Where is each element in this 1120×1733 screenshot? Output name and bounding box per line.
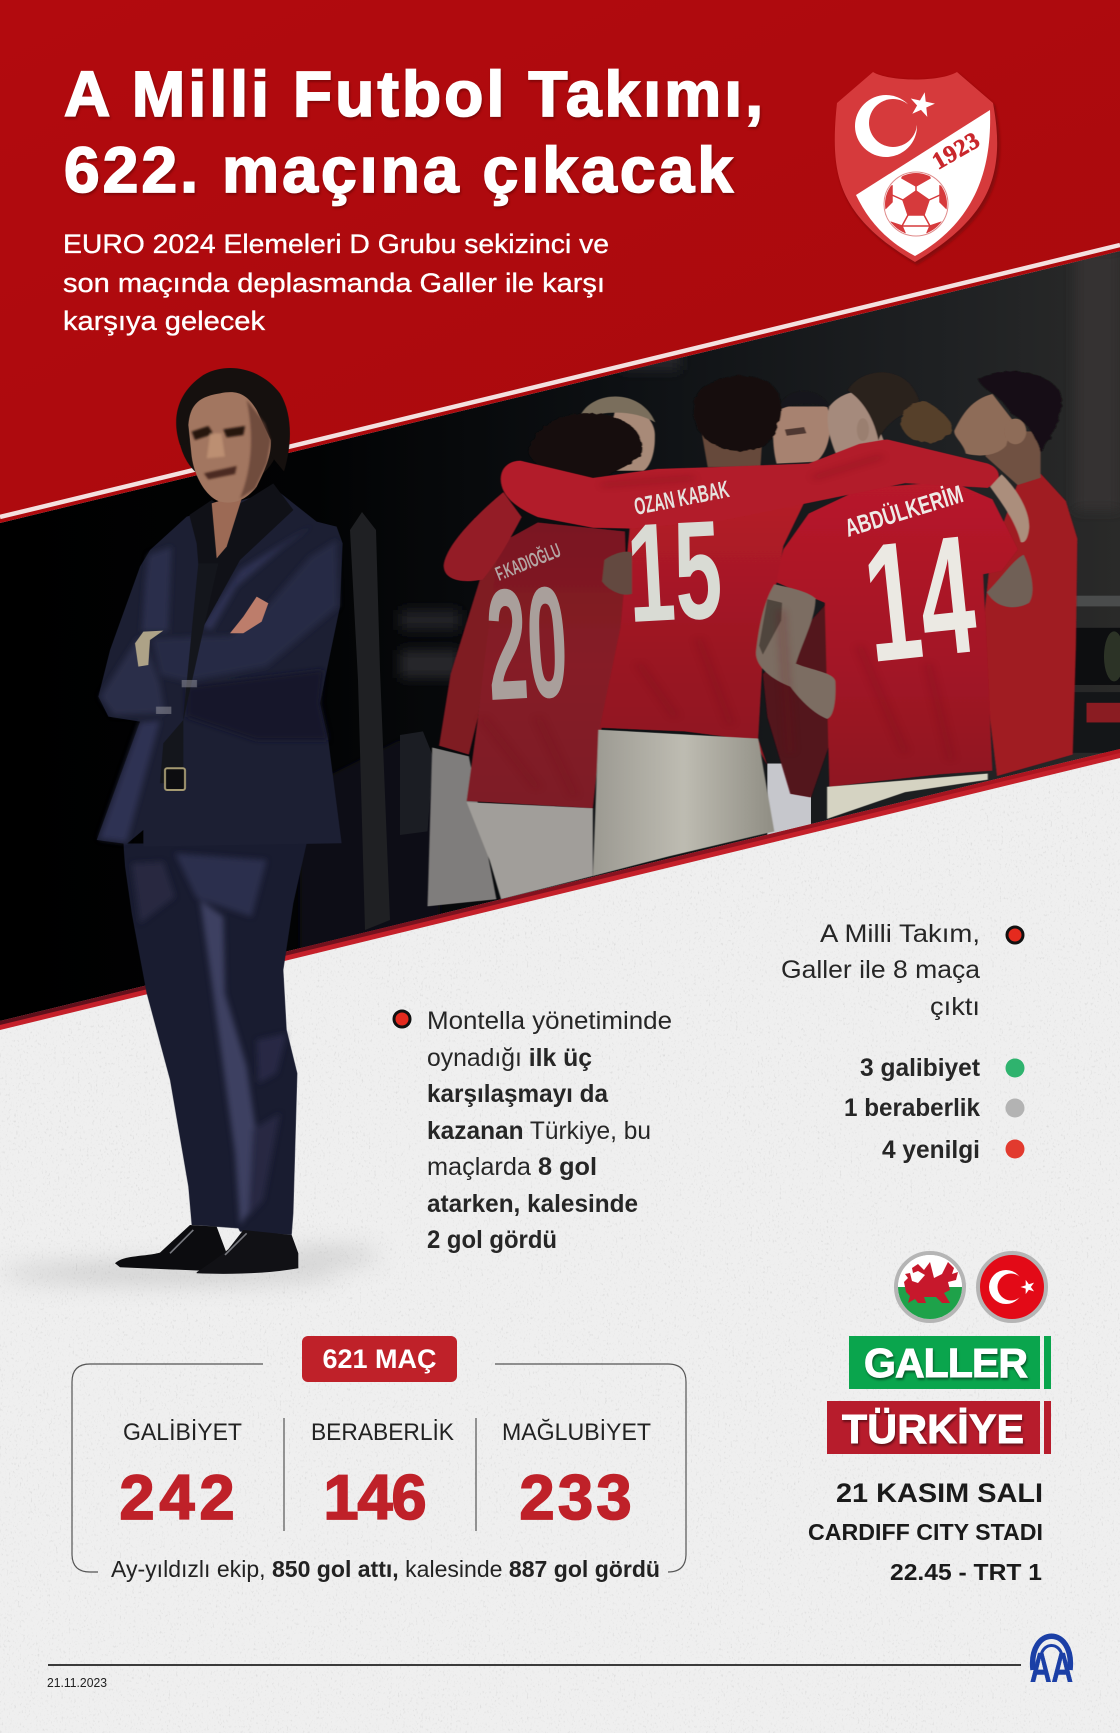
bullet [394,1011,410,1027]
hand [230,597,268,633]
callout: Montella record: Montella yönetiminde [427,1007,672,1035]
jacket [97,490,343,847]
stat: losses: 233 [520,1463,632,1533]
callout: record against Wales [781,920,1024,1164]
stat: draws [311,1419,454,1533]
trousers and shoes [115,843,307,1274]
number 14 player jersey [774,481,1018,787]
number 15 player jersey and arm [600,503,804,765]
neck [212,493,243,558]
player 20 jersey [467,522,628,808]
callout: Montella record: kazanan Türkiye, bu [427,1117,651,1145]
photo: team celebration: OZAN KABAK [632,476,732,521]
curly head [529,413,643,480]
goals summary: Ay-yıldızlı ekip, 850 gol attı, kalesinde 887 gol gördü [111,1556,660,1582]
callout: Montella record: 2 gol gördü [427,1226,557,1254]
callout: Montella record [394,1007,672,1254]
stat: losses: MAĞLUBİYET [502,1419,651,1446]
crescent [855,95,917,157]
match details: 21 KASIM SALI [836,1478,1043,1508]
flag: Turkey [978,1253,1046,1321]
stat: wins: 242 [120,1463,234,1533]
left arm behind [444,492,522,581]
hair [176,368,290,487]
callout: record against Wales: A Milli Takım, [820,920,980,948]
equipment at right [1075,596,1120,606]
stat: losses [502,1419,651,1533]
lower red diagonal band [0,749,1120,1030]
stat: wins [120,1419,242,1533]
background figure [300,740,440,965]
top red panel [0,0,1120,523]
callout: record against Wales: 3 galibiyet [860,1054,981,1082]
footer rule [48,1664,1021,1666]
match details: CARDIFF CITY STADI [808,1519,1043,1545]
callout: record against Wales: 4 yenilgi [882,1136,980,1164]
left player pants [428,747,496,906]
callout: Montella record: karşılaşmayı da [427,1080,609,1108]
stat: draws: BERABERLİK [311,1419,454,1446]
face shadows [192,400,271,498]
photo: team celebration: F.KADIOĞLU [492,538,564,586]
match details: 22.45 - TRT 1 [890,1559,1042,1585]
callout: Montella record: atarken, kalesinde [427,1190,638,1218]
face [188,392,271,503]
date: 21.11.2023 [47,1675,107,1690]
photo: coach standing [0,368,380,1282]
far right player [981,474,1077,776]
jersey names: ABDÜLKERİM [841,479,966,543]
photo: team celebration: 20 [483,554,572,734]
corner post [350,512,390,930]
callout: record against Wales: çıktı [930,993,980,1021]
watch [135,631,163,667]
title: A Milli Futbol Takımı, [64,58,763,130]
right arm [987,555,1032,607]
subtitle: EURO 2024 Elemeleri D Grubu sekizinci ve [63,229,609,259]
logo: Anadolu Agency [1030,1636,1073,1691]
stat: wins: GALİBİYET [123,1419,242,1446]
team bar: Türkiye: TÜRKİYE [842,1406,1024,1452]
hand between shirts [602,552,632,595]
leftmost player body [439,528,510,755]
callout: record against Wales: Galler ile 8 maça [781,956,980,984]
centre face [773,406,830,464]
dark shirt [189,483,293,627]
panel: 621 match stats [72,1336,686,1582]
team bar: Galler: GALLER [864,1340,1028,1386]
logo: Anadolu Agency: AA [1030,1644,1073,1691]
1923: 1923 [928,128,984,175]
jersey numbers: 14 [856,500,983,698]
tattoo arm [756,584,836,719]
callout: Montella record: maçlarda 8 gol [427,1153,597,1181]
photo: team celebration: 15 [623,490,725,652]
floor shadow [0,1249,380,1282]
match details [808,1478,1043,1585]
number 15 player shorts [593,730,774,876]
back blond player [602,406,655,471]
callout: record against Wales: 1 beraberlik [844,1094,980,1122]
pill: 621 MAÇ: 621 MAÇ [322,1344,436,1374]
subtitle: karşıya gelecek [63,306,266,336]
bullet [1007,927,1023,943]
photo: team celebration [0,240,1120,1040]
star [908,90,937,118]
callout: Montella record: oynadığı ilk üç [427,1044,592,1072]
background stadium lights [400,250,1120,678]
subtitle [63,229,609,336]
football [884,172,948,236]
flag: Wales [896,1253,964,1321]
title: 622. maçına çıkacak [64,134,733,206]
ponytail player [828,392,884,455]
dark player behind [763,603,834,797]
logo: TFF shield [835,72,1000,265]
sleeve buttons [182,680,197,687]
pill: 621 MAÇ [302,1336,457,1382]
dim spectator at left edge [400,731,433,835]
light gap [767,764,811,835]
centre curly head [702,434,762,468]
title [64,58,763,206]
stat: draws: 146 [324,1463,426,1533]
jacket highlights [99,525,338,842]
belt [165,768,185,790]
subtitle: son maçında deplasmanda Galler ile karşı [63,268,605,298]
jersey folds [604,456,936,696]
